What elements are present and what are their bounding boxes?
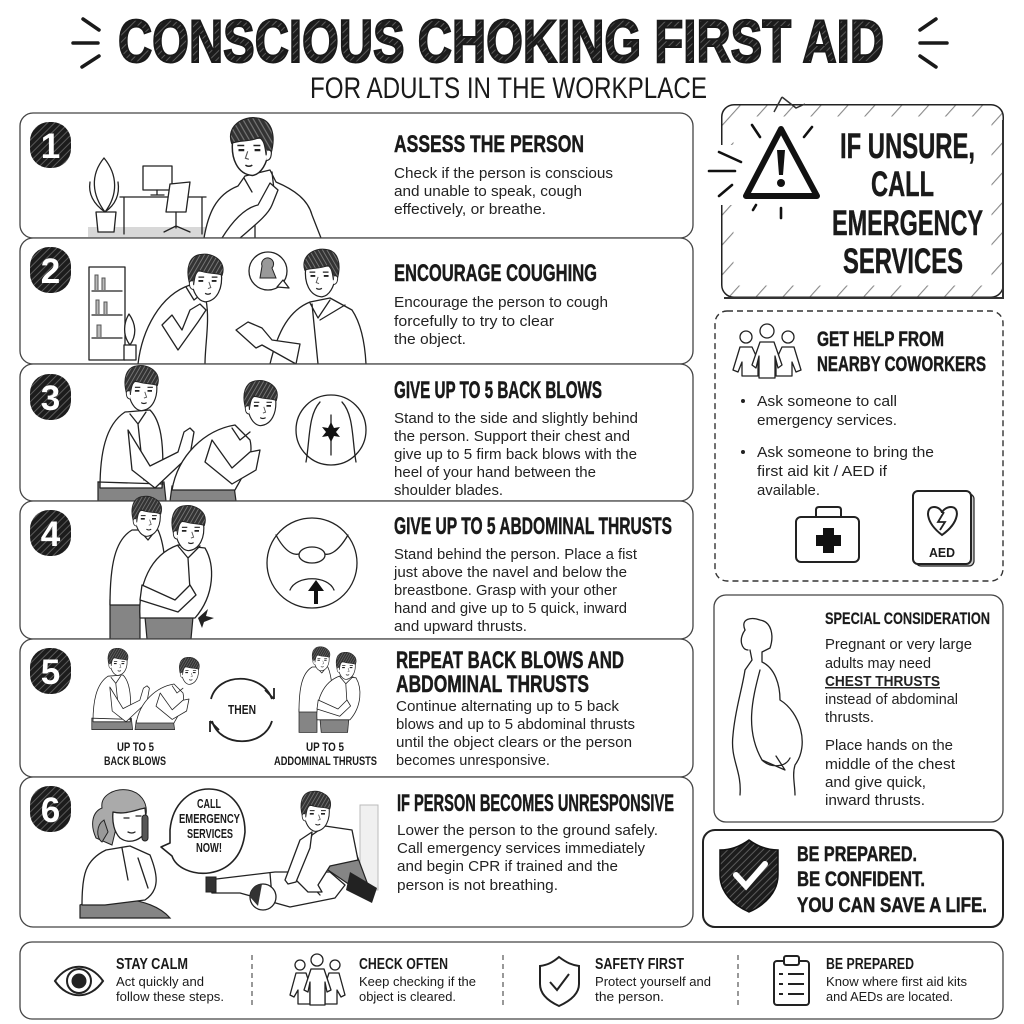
badge 6: 6 xyxy=(41,791,60,830)
body text: the object. xyxy=(394,331,466,348)
tip: safety first: SAFETY FIRST xyxy=(595,956,684,973)
body text: and upward thrusts. xyxy=(394,618,527,635)
illustration: bookshelf and two men xyxy=(89,249,366,364)
icon: AED: AED xyxy=(929,545,955,560)
panel: step 1 assess the person xyxy=(20,113,693,238)
body text: until the object clears or the person xyxy=(396,734,632,751)
slogan: BE PREPARED. xyxy=(797,843,917,866)
body text: and give quick, xyxy=(825,774,926,791)
decorative title bursts xyxy=(73,19,947,67)
body text: heel of your hand between the xyxy=(394,464,596,481)
body text: CHEST THRUSTS xyxy=(825,673,940,690)
tip: check often: CHECK OFTEN xyxy=(359,956,448,973)
heading: ASSESS THE PERSON xyxy=(394,131,584,158)
body text xyxy=(393,546,638,635)
heading: GIVE UP TO 5 ABDOMINAL THRUSTS xyxy=(394,513,672,540)
body text xyxy=(394,165,613,218)
speech bubble xyxy=(161,789,245,873)
badge 5: 5 xyxy=(41,653,60,692)
tip: stay calm: follow these steps. xyxy=(116,989,224,1004)
callout text: SERVICES xyxy=(843,242,963,281)
speech bubble: EMERGENCY xyxy=(179,812,240,826)
bullet list: available. xyxy=(757,482,820,499)
labels under illustrations: UP TO 5 xyxy=(306,740,344,754)
tip: stay calm: Act quickly and xyxy=(116,974,204,989)
heading: REPEAT BACK BLOWS AND xyxy=(396,647,624,674)
inset: hand placement with up arrow xyxy=(267,518,357,608)
panel: step 4 abdominal thrusts xyxy=(20,496,693,639)
badge 2: 2 xyxy=(41,252,60,291)
panel: be prepared banner xyxy=(703,830,1003,927)
body text: Lower the person to the ground safely. xyxy=(397,822,658,839)
slogan xyxy=(797,843,987,917)
tip: be prepared xyxy=(774,956,967,1005)
tip: check often: Keep checking if the xyxy=(359,974,476,989)
bullet list xyxy=(741,393,934,499)
illustration: rescuer giving thrusts xyxy=(110,496,214,639)
badge 2 xyxy=(30,247,71,293)
illustration: office and choking man xyxy=(88,118,321,238)
illustration: woman calling xyxy=(80,790,170,918)
icon: AED xyxy=(913,491,974,566)
tip: safety first: the person. xyxy=(595,989,664,1004)
body text: forcefully to try to clear xyxy=(394,313,554,330)
body text: and begin CPR if trained and the xyxy=(397,858,618,875)
body text: blows and up to 5 abdominal thrusts xyxy=(396,716,635,733)
labels under illustrations: UP TO 5 xyxy=(117,740,154,754)
heading xyxy=(817,328,986,376)
tip: be prepared: BE PREPARED xyxy=(826,956,914,973)
heading: GIVE UP TO 5 BACK BLOWS xyxy=(394,377,602,404)
body text: instead of abdominal xyxy=(825,691,958,708)
speech bubble: NOW! xyxy=(196,841,222,855)
body text: becomes unresponsive. xyxy=(396,752,550,769)
badge 3: 3 xyxy=(41,379,60,418)
cycle arrows with then label: THEN xyxy=(228,702,256,717)
bullet list: Ask someone to call xyxy=(757,393,897,410)
badge 6 xyxy=(30,786,71,832)
callout text: CALL xyxy=(871,165,934,204)
speech bubble: SERVICES xyxy=(187,827,233,841)
body text: Call emergency services immediately xyxy=(397,840,645,857)
body text: and unable to speak, cough xyxy=(394,183,582,200)
panel: step 6 unresponsive xyxy=(20,777,693,927)
body text: the person. Support their chest and xyxy=(394,428,630,445)
body text: person is not breathing. xyxy=(397,877,558,894)
icon: shield with check xyxy=(720,840,778,912)
heading: IF PERSON BECOMES UNRESPONSIVE xyxy=(397,790,674,817)
callout text xyxy=(832,127,983,281)
bullet list: Ask someone to bring the xyxy=(757,444,934,461)
body text: give up to 5 firm back blows with the xyxy=(394,446,637,463)
body text: effectively, or breathe. xyxy=(394,201,546,218)
bullet list: emergency services. xyxy=(757,412,897,429)
tip: check often: object is cleared. xyxy=(359,989,456,1004)
illustration: mini back blows xyxy=(92,648,199,730)
badge 5 xyxy=(30,648,71,694)
heading: ENCOURAGE COUGHING xyxy=(394,260,597,287)
tip: be prepared: Know where first aid kits xyxy=(826,974,967,989)
illustration: rescuer and person on ground xyxy=(206,791,378,910)
labels under illustrations: ADDOMINAL THRUSTS xyxy=(274,754,377,768)
illustration: rescuer giving back blows xyxy=(98,365,277,501)
panel: get help from coworkers xyxy=(715,311,1003,581)
tip: safety first: Protect yourself and xyxy=(595,974,711,989)
body text: inward thrusts. xyxy=(825,792,925,809)
body text xyxy=(394,294,608,348)
body text: shoulder blades. xyxy=(394,482,503,499)
bullet list: first aid kit / AED if xyxy=(757,463,888,480)
body text: Continue alternating up to 5 back xyxy=(396,698,620,715)
speech bubble: CALL xyxy=(197,797,221,811)
labels under illustrations xyxy=(104,740,377,768)
body text xyxy=(396,698,635,769)
badge 1: 1 xyxy=(41,127,60,166)
tip: stay calm xyxy=(55,956,224,1004)
panel: step 3 back blows xyxy=(20,364,693,501)
body text xyxy=(397,822,658,894)
body text: breastbone. Grasp with your other xyxy=(394,582,617,599)
body text: middle of the chest xyxy=(825,756,956,773)
body text: Stand behind the person. Place a fist xyxy=(394,546,638,563)
illustration: pregnant woman xyxy=(733,619,802,795)
tip: safety first xyxy=(540,956,711,1006)
cycle arrows with then label xyxy=(210,679,274,741)
body text xyxy=(825,636,972,809)
body text xyxy=(394,410,638,499)
body text: thrusts. xyxy=(825,709,874,726)
body text: Place hands on the xyxy=(825,737,953,754)
body text: Encourage the person to cough xyxy=(394,294,608,311)
panel: step 2 encourage coughing xyxy=(20,238,693,364)
tip: check often xyxy=(290,954,476,1005)
body text: Check if the person is conscious xyxy=(394,165,613,182)
heading: ABDOMINAL THRUSTS xyxy=(396,671,589,698)
heading: GET HELP FROM xyxy=(817,328,944,351)
badge 4: 4 xyxy=(41,515,61,554)
icon: first aid kit xyxy=(796,507,859,562)
panel: bottom tips xyxy=(20,942,1003,1019)
body text: hand and give up to 5 quick, inward xyxy=(394,600,627,617)
body text: adults may need xyxy=(825,655,931,672)
body text: Pregnant or very large xyxy=(825,636,972,653)
illustration: mini thrusts xyxy=(299,647,360,732)
body text: just above the navel and below the xyxy=(393,564,627,581)
heading xyxy=(396,647,624,698)
icon: three people xyxy=(733,324,801,378)
tip: be prepared: and AEDs are located. xyxy=(826,989,953,1004)
tip: stay calm: STAY CALM xyxy=(116,956,188,973)
slogan: BE CONFIDENT. xyxy=(797,868,925,891)
subtitle: FOR ADULTS IN THE WORKPLACE xyxy=(310,72,707,105)
icon: warning triangle xyxy=(709,125,817,218)
body text: Stand to the side and slightly behind xyxy=(394,410,638,427)
panel: if unsure callout xyxy=(704,97,1003,298)
badge 4 xyxy=(30,510,71,556)
labels under illustrations: BACK BLOWS xyxy=(104,754,166,768)
badge 1 xyxy=(30,122,71,168)
inset: back diagram xyxy=(296,395,366,465)
panel: special consideration xyxy=(714,595,1003,822)
badge 3 xyxy=(30,374,71,420)
panel: step 5 repeat xyxy=(20,639,693,777)
